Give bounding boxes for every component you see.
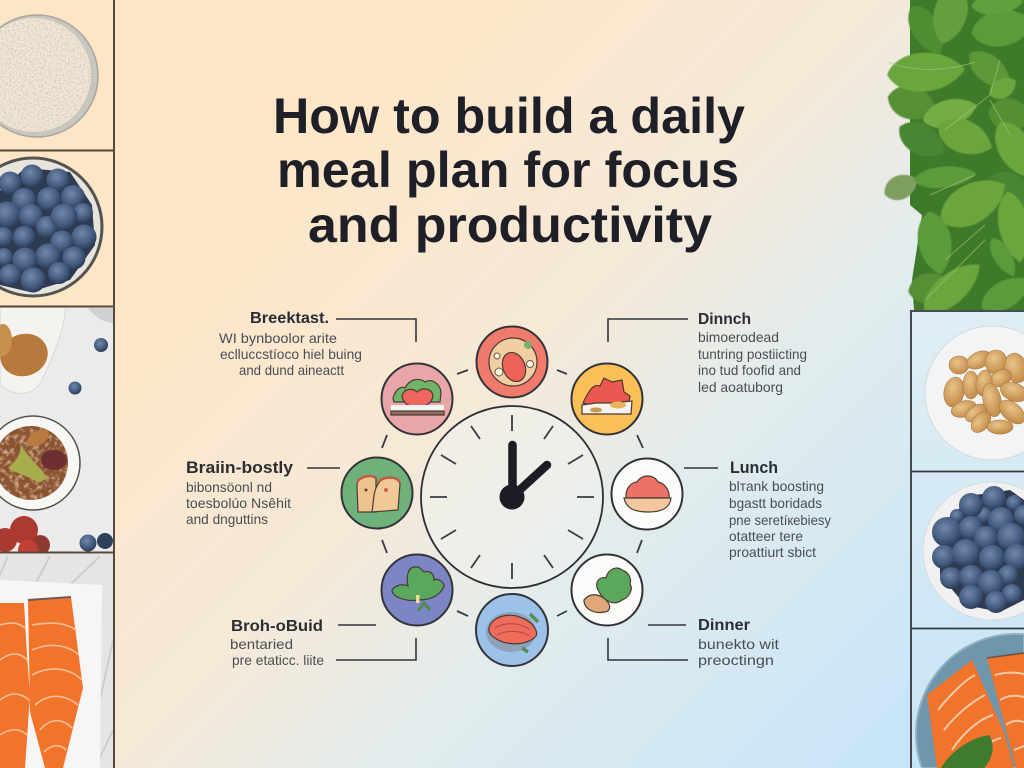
label: bottom right dinner: bunekto wit: [698, 636, 779, 652]
label: bottom left snack: Broh-oBuid: [231, 618, 323, 635]
label: bottom right dinner: preoctingn: [698, 652, 774, 668]
title: [273, 88, 745, 253]
label: top right dinner: ino tud foofid and: [698, 362, 801, 378]
label: top right dinner: bimoerodead: [698, 329, 779, 345]
title: meal plan for focus: [277, 142, 739, 198]
label: brain-boosting: bibonsöonl nd: [186, 479, 272, 495]
panel: blueberry plate: [923, 482, 1024, 620]
label: breakfast: and dund aineactt: [239, 362, 344, 378]
label: lunch: [729, 458, 831, 560]
leader lines: [307, 319, 718, 660]
panel: breakfast table with granola bowl: [0, 306, 113, 560]
label: lunch: pne seretíкebiesy: [729, 512, 831, 528]
icon: pink salad plate: [382, 364, 452, 434]
label: brain-boosting: Braiin-bostly: [186, 458, 294, 477]
label: bottom left snack: pre etaticc. liite: [232, 652, 324, 668]
clock hands: [500, 445, 547, 510]
label: breakfast: WI bynboolor arite: [219, 330, 337, 346]
label: lunch: otatteer tere: [729, 528, 803, 544]
panel: rice bowl: [0, 15, 98, 137]
label: top right dinner: [698, 311, 807, 395]
label: lunch: blтank boosting: [729, 478, 824, 494]
label: top right dinner: tuntring postiicting: [698, 346, 807, 362]
label: breakfast: [219, 310, 362, 378]
panel: salmon on marble: [0, 554, 113, 768]
panel: left food column: [0, 0, 114, 768]
panel: blueberry bowl: [0, 158, 102, 296]
column dividers: [911, 310, 1024, 768]
label: breakfast: eclluccstíoco hiel buing: [220, 346, 362, 362]
label: brain-boosting: toesbolúo Nsêhit: [186, 495, 291, 511]
label: bottom right dinner: [698, 617, 779, 668]
panel: salmon plate: [916, 634, 1024, 768]
panel: nuts plate: [925, 326, 1024, 460]
label: bottom left snack: bentaried: [230, 636, 293, 652]
title: and productivity: [308, 197, 712, 253]
label: top right dinner: Dinnch: [698, 311, 751, 328]
icon: orange dish: [572, 364, 642, 434]
connector dashes around the clock: [382, 370, 643, 616]
icon: white fruit bowl: [612, 458, 682, 530]
label: lunch: proattiurt sbict: [729, 544, 816, 560]
image: spinach leaves: [880, 0, 1024, 323]
icon: purple leaves: [382, 554, 452, 626]
icon: red plate: [476, 326, 548, 398]
clock: [421, 406, 603, 588]
icon: green toast: [342, 458, 412, 528]
label: lunch: Lunch: [730, 458, 778, 477]
icon: blue salmon plate: [476, 594, 548, 666]
panel: right food column: [911, 310, 1024, 768]
icon: white greens and ginger: [572, 554, 642, 626]
label: bottom right dinner: Dinner: [698, 617, 750, 634]
column dividers: [0, 0, 114, 768]
label: breakfast: Breektast.: [250, 310, 329, 327]
label: brain-boosting: and dnguttins: [186, 511, 268, 527]
title: How to build a daily: [273, 88, 745, 144]
label: bottom left snack: [230, 618, 324, 668]
label: top right dinner: led aoatuborg: [698, 379, 783, 395]
label: brain-boosting: [186, 458, 294, 527]
label: lunch: bgastt boridads: [729, 495, 822, 511]
